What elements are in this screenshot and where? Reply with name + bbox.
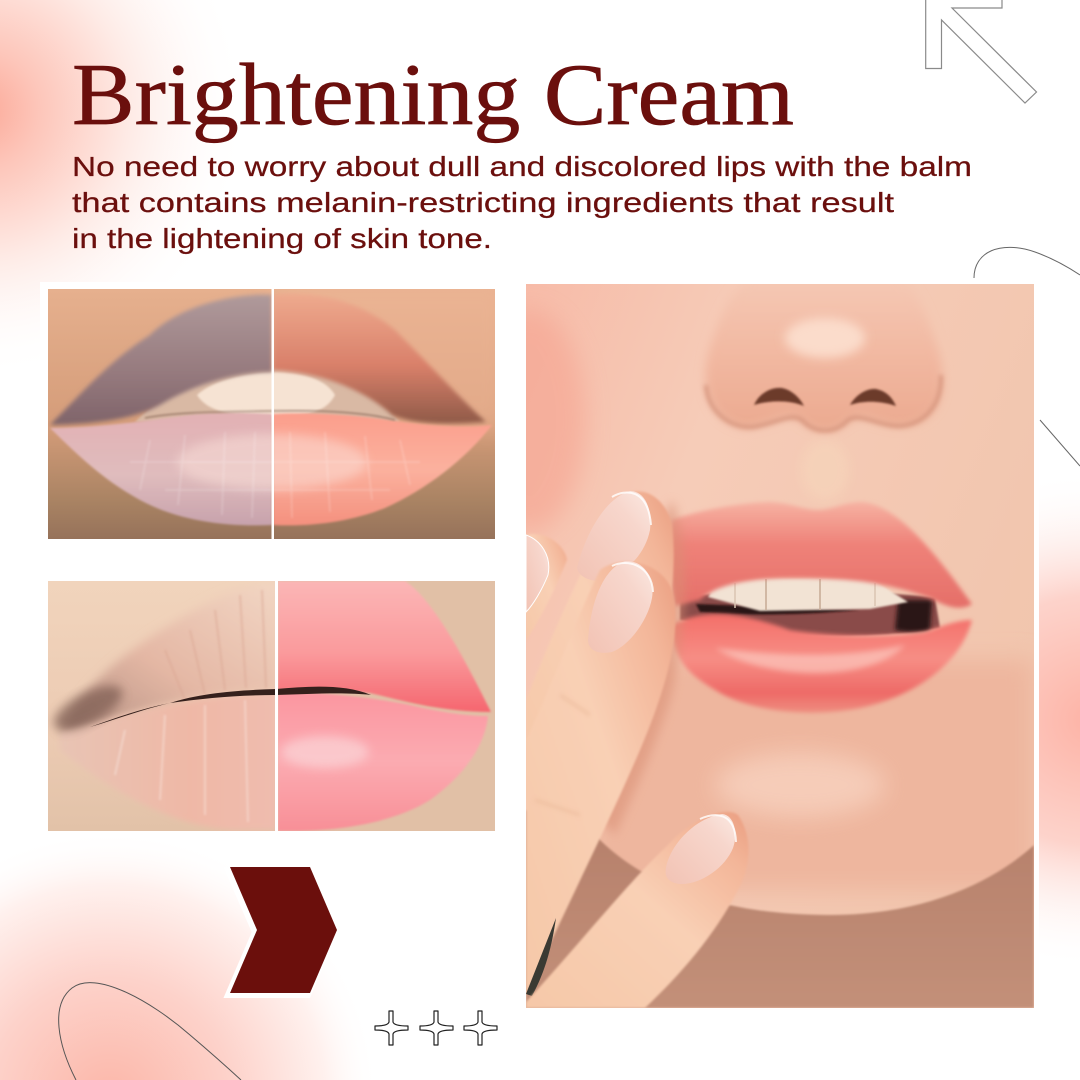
- small finger at left: [526, 534, 567, 640]
- lower lip sparkle: [281, 736, 369, 768]
- lower lip gloss: [715, 645, 905, 673]
- lower lip highlight: [177, 434, 367, 490]
- white frame edge of main photo: [526, 430, 1039, 1012]
- chin highlight: [715, 753, 885, 817]
- cheek blush: [526, 314, 587, 530]
- lower-mouth background: [680, 592, 940, 636]
- mouth interior: [135, 368, 400, 422]
- finger shadow on face: [600, 500, 685, 835]
- decorative curve, bottom left: [59, 983, 241, 1080]
- sparkle icons: [375, 1011, 497, 1045]
- lower lip left half: [60, 692, 276, 830]
- dark mouth interior, left: [696, 604, 860, 614]
- decorative curve, upper right: [974, 247, 1080, 278]
- description text: No need to worry about dull and discolored lips with the balm: [72, 151, 972, 182]
- photo: lips before and after, bottom: [47, 581, 495, 831]
- upper lip left half, dull: [50, 295, 272, 425]
- mouth shadow: [145, 411, 395, 420]
- photo divider: [275, 581, 278, 831]
- teeth: [197, 372, 335, 416]
- dark mouth interior, right: [895, 600, 932, 632]
- main photo: finger on lips: [526, 284, 1034, 1008]
- right nostril: [850, 389, 896, 406]
- left nostril: [754, 388, 804, 406]
- decorative line, right edge: [1040, 420, 1080, 466]
- lip corner shadow: [48, 680, 127, 736]
- photo divider: [272, 289, 274, 539]
- upper lip right half, pink: [278, 581, 491, 712]
- title: Brightening Cream: [72, 47, 794, 144]
- lower lip: [672, 614, 972, 713]
- upper lip left half: [60, 606, 273, 731]
- middle finger: [526, 491, 674, 800]
- description text: that contains melanin-restricting ingredients that result: [72, 187, 894, 218]
- lower lip right half, coral: [273, 413, 492, 525]
- chin tone: [590, 660, 1034, 890]
- philtrum: [801, 440, 849, 500]
- nose wing creases: [706, 375, 941, 430]
- index finger: [526, 561, 675, 995]
- decorative arrow outline, top right: [926, 0, 1036, 103]
- white backing panel for comparison photos: [40, 282, 503, 838]
- neck under jaw: [526, 810, 1034, 1008]
- lower lip left creases: [115, 700, 248, 822]
- description text: [72, 151, 972, 254]
- upper lip right half, coral: [273, 294, 486, 424]
- lower lip left half, dull: [50, 413, 272, 525]
- mouth line: [90, 687, 371, 727]
- dark background sliver: [526, 918, 556, 996]
- lower lip right half, pink: [278, 692, 488, 831]
- arrow chevron: [228, 867, 337, 995]
- lower lip creases: [130, 432, 420, 518]
- teeth: [708, 578, 908, 611]
- photo: lips before and after, top: [48, 280, 510, 539]
- nose tip highlight: [785, 318, 865, 358]
- nose: [703, 296, 944, 434]
- description text: in the lightening of skin tone.: [72, 223, 492, 254]
- skin base: [526, 284, 1034, 1008]
- upper lip: [670, 502, 972, 608]
- upper lip left creases: [190, 590, 266, 687]
- lower finger: [526, 812, 748, 1008]
